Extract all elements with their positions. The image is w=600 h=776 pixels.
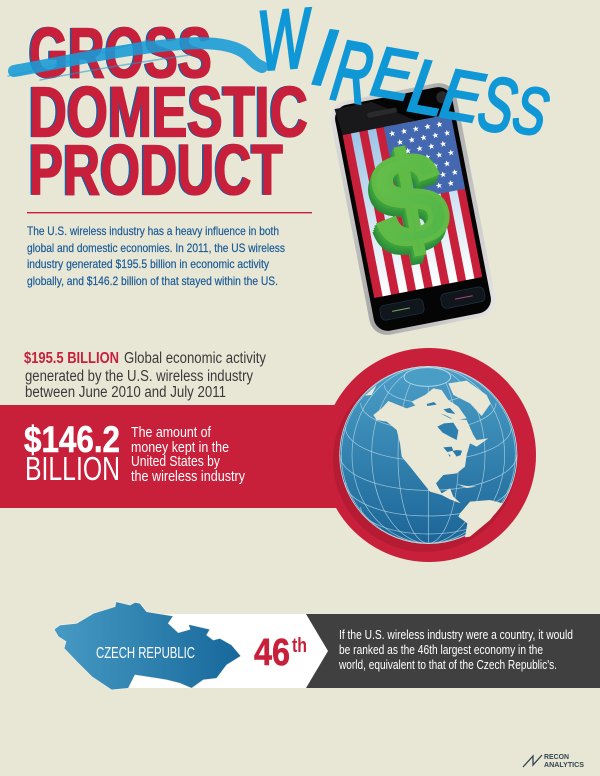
stat: global economic activity: Global economic activity [124, 350, 266, 367]
hudson bay and arctic channels [427, 402, 458, 440]
handwritten word: WIRELESS: E [435, 54, 490, 138]
handwritten word: WIRELESS: I [308, 13, 341, 103]
rank explanation [338, 627, 573, 672]
sphere [340, 366, 517, 544]
big number: $146.2 [24, 419, 120, 460]
intro paragraph: globally, and $146.2 billion of that stayed within the US. [27, 274, 278, 288]
czech republic map [54, 602, 241, 690]
title word: DOMESTIC: DOMESTIC [28, 74, 306, 152]
phone body [327, 80, 499, 338]
icon: green dollar sign: $ [358, 125, 457, 283]
great lakes [443, 447, 462, 457]
map label: CZECH REPUBLIC [96, 645, 195, 662]
title word: PRODUCT: PRODUCT [28, 132, 282, 210]
rank explanation: be ranked as the 46th largest economy in the [339, 642, 543, 657]
stat: global economic activity: between June 2010 and July 2011 [25, 384, 226, 401]
logo wordmark: RECON [544, 752, 569, 761]
intro paragraph: global and domestic economies. In 2011, the US wireless [27, 241, 285, 255]
icon: green dollar sign: $ [356, 130, 455, 287]
dark text panel [306, 614, 600, 688]
handwritten word: WIRELESS: S [472, 58, 524, 150]
polar cap [404, 368, 451, 386]
red band [0, 405, 345, 508]
stat: 146.2 billion [24, 419, 246, 487]
handwritten word: WIRELESS: L [403, 43, 453, 132]
red disc behind globe [322, 348, 536, 562]
icon: green dollar sign: $ [358, 123, 457, 280]
logo wordmark: ANALYTICS [544, 760, 584, 769]
globe [340, 366, 517, 544]
map shape [54, 602, 241, 690]
title: gross domestic product [28, 14, 308, 210]
stat: global economic activity: generated by the U.S. wireless industry [25, 368, 253, 385]
logo wordmark [544, 752, 584, 769]
logo mark [523, 755, 542, 767]
stat: global economic activity [24, 350, 266, 401]
description: The amount of [131, 425, 212, 441]
globe shadow [333, 368, 517, 552]
smartphone with flag and dollar [327, 80, 499, 338]
handwritten word: WIRELESS [255, 0, 554, 151]
title rule [27, 212, 312, 213]
white ranking strip [125, 614, 330, 688]
title word: PRODUCT: PRODUCT [28, 132, 282, 210]
description: the wireless industry [131, 469, 246, 485]
title word: PRODUCT: PRODUCT [29, 132, 283, 210]
description [131, 425, 246, 485]
title word: GROSS: GROSS [28, 14, 210, 94]
stat: global economic activity: $195.5 BILLION [24, 350, 119, 367]
intro paragraph: industry generated $195.5 billion in economic activity [27, 257, 269, 271]
icon: green dollar sign: $ [360, 121, 459, 278]
big number [24, 419, 120, 487]
rank: 46th: th [292, 635, 307, 657]
description: money kept in the [131, 440, 229, 456]
icon: green dollar sign: $ [357, 128, 456, 285]
rank: 46th: 46 [254, 632, 290, 674]
handwritten word: WIRELESS: E [366, 32, 421, 116]
intro paragraph [27, 224, 285, 288]
flag on screen [343, 114, 482, 298]
title word: DOMESTIC: DOMESTIC [28, 74, 306, 152]
title word: DOMESTIC: DOMESTIC [29, 74, 308, 152]
land masses [365, 381, 503, 537]
description: United States by [131, 454, 221, 470]
brush strike through GROSS [8, 40, 262, 80]
big number: BILLION [25, 450, 120, 487]
title word: GROSS: GROSS [28, 14, 210, 94]
title word: GROSS: GROSS [29, 14, 212, 94]
handwritten word: WIRELESS: R [326, 23, 379, 124]
graticule [340, 367, 517, 543]
logo: recon analytics [523, 752, 584, 769]
handwritten word: WIRELESS: S [507, 72, 554, 151]
intro paragraph: The U.S. wireless industry has a heavy influence in both [27, 224, 279, 238]
